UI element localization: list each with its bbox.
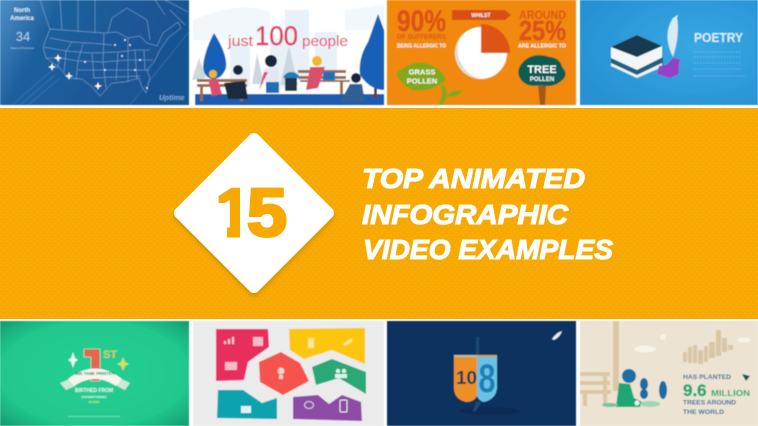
- tree: tree pollen: TREE: [527, 64, 557, 76]
- statistic: around 25%: ARE ALLERGIC TO: [518, 44, 566, 50]
- title: INFOGRAPHIC: [362, 199, 569, 230]
- panel: North America map thumbnail: [0, 0, 189, 105]
- people: [208, 55, 365, 102]
- leaf: grass pollen: GRASS: [409, 68, 435, 76]
- central banner: [0, 108, 758, 319]
- person sitting: [616, 369, 642, 407]
- tree: right: [360, 14, 384, 98]
- statistic: around 25%: [518, 8, 566, 50]
- leaf: grass pollen: [396, 62, 463, 105]
- shape: yellow with tablet and tag icons: [289, 328, 365, 364]
- panel: ink tank printer thumbnail: [0, 321, 189, 426]
- text: trees around the world: THE WORLD: [683, 409, 724, 416]
- shape: purple with chat and phone icons: [293, 395, 362, 421]
- title: [362, 163, 614, 265]
- tree: left: [203, 33, 226, 94]
- skyline: [683, 330, 733, 364]
- text: trees around the world: TREES AROUND: [683, 400, 736, 406]
- icon: ink bottle: [657, 58, 680, 78]
- shape: teal with envelope icon: [217, 390, 277, 419]
- map of the United States: [12, 0, 188, 105]
- number: 15: 5: [247, 175, 287, 251]
- bench: left: [197, 79, 247, 101]
- heading: has planted: HAS PLANTED: [683, 374, 731, 381]
- small trees and ground: [602, 378, 667, 407]
- heading: POETRY: POETRY: [694, 31, 744, 45]
- number: 15: 1: [216, 175, 253, 251]
- dreidel handle and tip: [473, 337, 481, 411]
- heading: North America: [10, 8, 34, 22]
- logo: Uptime: Uptime: [159, 93, 184, 102]
- leaf: grass pollen: POLLEN: [407, 76, 437, 86]
- statistic: 9.6 million: [683, 381, 750, 400]
- shape: coral with light bulb icon: [259, 352, 309, 395]
- panel: just 100 people illustration: [192, 0, 384, 105]
- arrow: whilst: WHILST: [471, 13, 491, 19]
- statistic: around 25%: AROUND: [519, 8, 566, 22]
- tree: tree pollen: [518, 55, 566, 105]
- text: trees around the world: [683, 400, 736, 416]
- numeral: 1st: ST: [103, 349, 117, 361]
- fine print: [68, 416, 120, 417]
- tree trunk: [613, 321, 619, 391]
- icon: stacked books: [611, 35, 663, 78]
- text: birthed from: IN 2009: [89, 400, 100, 404]
- title: VIDEO EXAMPLES: [363, 234, 614, 265]
- panel: trees planted thumbnail: [580, 321, 758, 426]
- statistic: 90% of sufferers: 90%: [397, 5, 446, 38]
- poem lines: [694, 52, 746, 76]
- heading: just 100 people: just: [227, 33, 254, 50]
- ribbon: ink tank printer: INK TANK PRINTER: [75, 371, 115, 376]
- heading: North America: America: [10, 16, 34, 22]
- icon: bird: [742, 374, 750, 381]
- blue ground: [195, 94, 384, 105]
- title: TOP ANIMATED: [362, 163, 585, 194]
- heading: North America: North: [14, 8, 30, 14]
- heading: just 100 people: 100: [255, 21, 298, 51]
- bench: [580, 372, 611, 406]
- panel: navy dreidel thumbnail: [387, 321, 576, 426]
- bench: right: [298, 70, 350, 94]
- numeral: 1st: [84, 349, 117, 381]
- statistic: 34 states and provinces: States & Provinces: [10, 46, 34, 50]
- statistic: 34 states and provinces: 34: [16, 29, 30, 44]
- background city: [193, 5, 384, 88]
- arrow: whilst: [452, 10, 511, 20]
- text: birthed from: BIRTHED FROM: [75, 388, 113, 394]
- text: birthed from: [75, 388, 113, 404]
- statistic: around 25%: 25%: [519, 15, 566, 46]
- icon: feather quill: [668, 15, 678, 57]
- text: birthed from: CROWDFUNDING: [81, 395, 107, 399]
- map location markers: [48, 39, 148, 90]
- grey trees: [192, 46, 298, 85]
- panel: pollen allergy infographic: [387, 0, 576, 105]
- icon: feather: [552, 331, 562, 340]
- panel: puzzle infographic: [193, 321, 384, 426]
- heading: just 100 people: people: [302, 33, 348, 50]
- ribbon: ink tank printer: [60, 368, 130, 390]
- statistic: 34 states and provinces: [10, 29, 34, 50]
- statistic: 9.6 million: MILLION: [711, 389, 750, 398]
- panel: poetry thumbnail: [580, 0, 758, 105]
- statistic: 9.6 million: 9.6: [683, 381, 707, 400]
- diamond badge with number 15: [180, 139, 328, 290]
- pie chart: 25 percent: [455, 24, 510, 79]
- shield: 8 blue: 8: [478, 357, 496, 401]
- heading: just 100 people: [227, 21, 348, 51]
- shape: crimson with chart, calendar and monitor icons: [216, 329, 269, 381]
- shield: 10 orange: [454, 355, 477, 402]
- statistic: 90% of sufferers: [397, 5, 446, 50]
- tree: tree pollen: POLLEN: [530, 77, 554, 83]
- statistic: 90% of sufferers: OF SUFFERERS: [397, 34, 446, 41]
- statistic: 90% of sufferers: BEING ALLERGIC TO: [397, 44, 446, 50]
- shield: 10 orange: 10: [456, 368, 477, 388]
- clouds: [634, 334, 751, 352]
- sparkles: [68, 352, 129, 371]
- shadow under dreidel: [460, 407, 520, 415]
- number: 15: [218, 188, 287, 238]
- shape: green with people icon: [312, 359, 366, 394]
